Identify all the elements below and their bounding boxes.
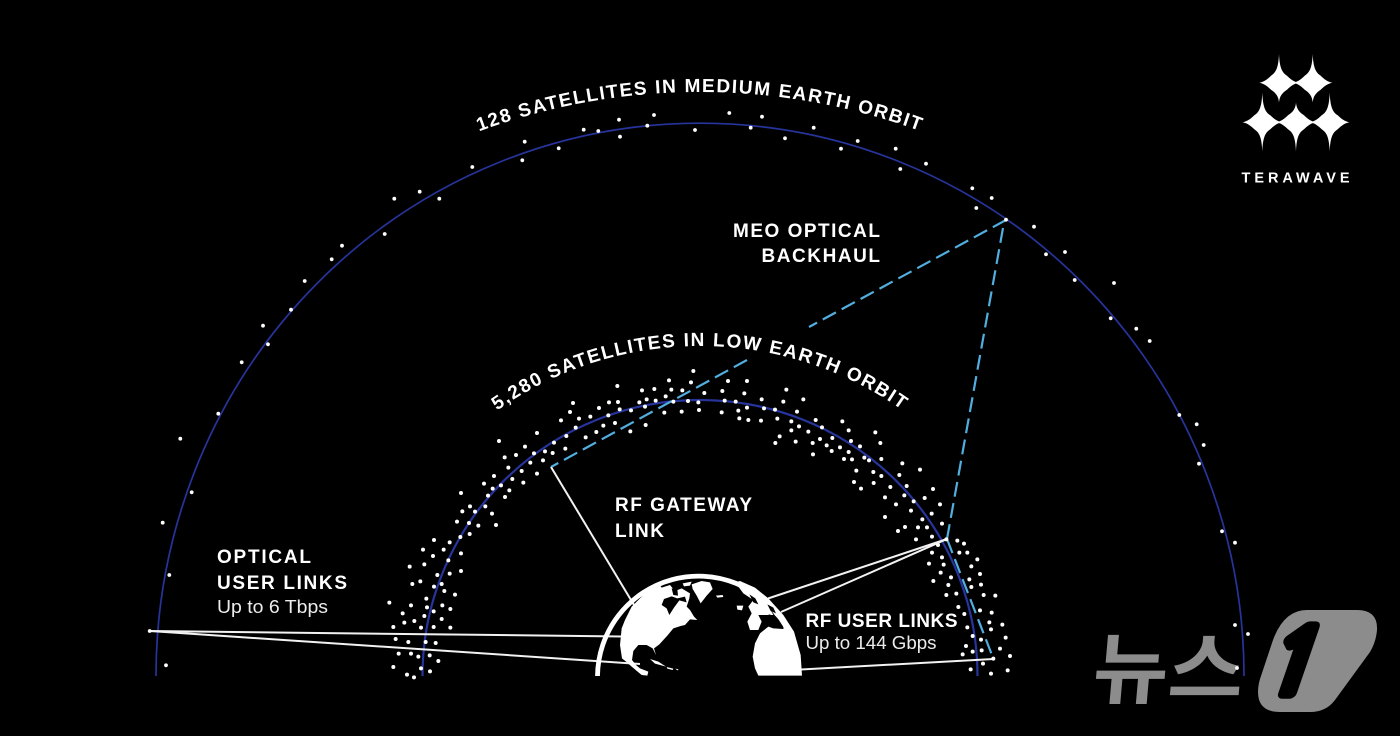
white radio and optical links: [150, 467, 994, 670]
label: optical user links: OPTICAL: [217, 547, 311, 568]
LEO satellites: eastern half: [704, 381, 1010, 674]
label: RF user links: [806, 611, 958, 653]
label: RF gateway link: [615, 495, 752, 542]
label: optical user links: USER LINKS: [217, 573, 347, 594]
label: MEO optical backhaul: [733, 221, 880, 267]
label: RF gateway link: RF GATEWAY: [615, 495, 752, 516]
label: MEO optical backhaul: MEO OPTICAL: [733, 221, 880, 242]
label: low earth orbit heading: 5,280 SATELLITES IN LOW EARTH ORBIT: [490, 332, 909, 409]
label: RF user links: Up to 144 Gbps: [806, 633, 936, 653]
label: RF gateway link: LINK: [615, 521, 664, 542]
label: MEO optical backhaul: BACKHAUL: [762, 246, 880, 267]
MEO optical backhaul dashed links: [551, 220, 1006, 659]
logo: Terawave stars and wordmark: [1242, 54, 1350, 187]
orbit: medium earth orbit arc: [156, 123, 1244, 676]
label: medium earth orbit heading: 128 SATELLITES IN MEDIUM EARTH ORBIT: [476, 78, 924, 131]
label: optical user links: Up to 6 Tbps: [217, 597, 328, 617]
watermark: news agency logo: 1: [1253, 618, 1339, 708]
LEO satellites: western half: [389, 371, 699, 677]
icon: earth globe: [598, 576, 802, 676]
MEO satellites: [150, 113, 1248, 668]
label: RF user links: RF USER LINKS: [806, 611, 958, 632]
watermark: news agency logo: 뉴스: [1089, 607, 1250, 720]
logo: Terawave stars and wordmark: TERAWAVE: [1242, 171, 1350, 187]
watermark: news agency logo: [1089, 607, 1377, 720]
label: optical user links: [217, 547, 347, 617]
orbit: low earth orbit arc: [422, 400, 978, 676]
